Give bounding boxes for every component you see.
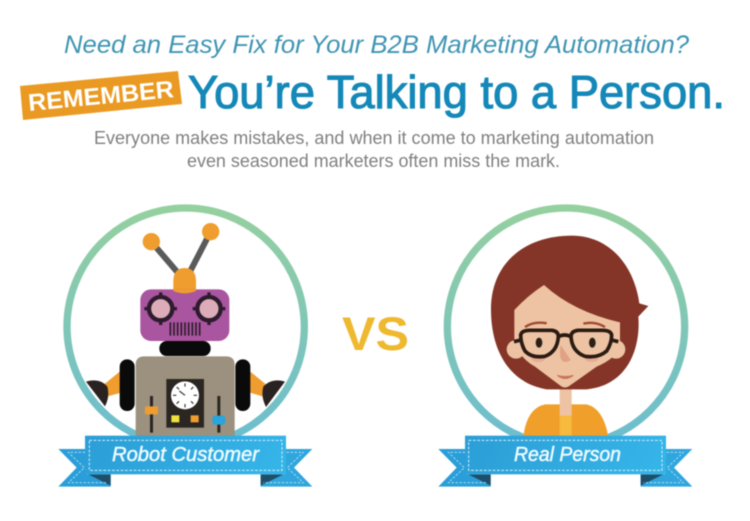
ribbon label: real person: Real Person bbox=[514, 444, 621, 466]
ribbon: real person bbox=[438, 436, 692, 487]
robot illustration bbox=[67, 208, 304, 445]
vs: VS bbox=[342, 307, 409, 360]
heading: You’re Talking to a Person. bbox=[188, 66, 725, 118]
person illustration bbox=[447, 208, 685, 445]
title: Need an Easy Fix for Your B2B Marketing Automation? bbox=[64, 31, 689, 59]
panel: robot customer bbox=[58, 208, 312, 487]
intro text: Everyone makes mistakes, and when it come to marketing automation bbox=[94, 128, 654, 148]
intro text bbox=[94, 128, 654, 171]
intro text: even seasoned marketers often miss the mark. bbox=[187, 151, 560, 171]
panel: real person bbox=[438, 208, 692, 487]
ribbon label: robot customer: Robot Customer bbox=[112, 444, 260, 466]
ribbon: robot customer bbox=[58, 436, 312, 487]
badge: remember: REMEMBER bbox=[27, 76, 175, 117]
